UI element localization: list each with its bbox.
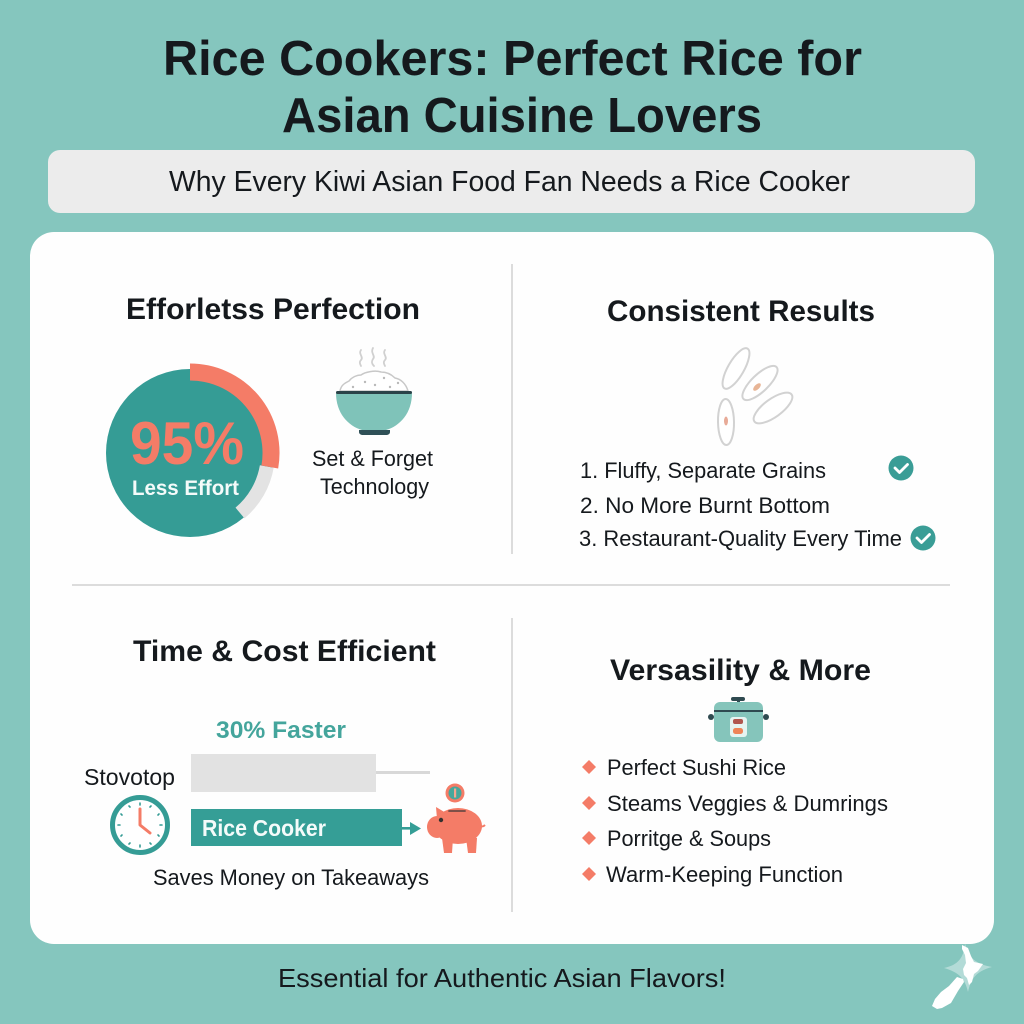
icon: rice cooker — [708, 697, 769, 742]
label: 30% faster: 30% Faster — [216, 717, 346, 744]
donut chart: 95% less effort: Less Effort — [132, 477, 239, 500]
bullet list — [582, 755, 888, 887]
footer tagline: Essential for Authentic Asian Flavors! — [278, 963, 726, 993]
subtitle banner — [48, 150, 975, 213]
heading: versatility and more: Versasility & More — [610, 654, 871, 687]
caption: set and forget technology: Set & Forget — [312, 446, 433, 471]
bullet list: Steams Veggies & Dumrings — [607, 791, 888, 816]
title: Rice Cookers: Perfect Rice for — [163, 32, 862, 86]
title — [163, 32, 862, 143]
title: Asian Cuisine Lovers — [282, 89, 762, 143]
heading: time and cost efficient: Time & Cost Efficient — [133, 635, 436, 668]
icon: rice bowl with steam — [336, 348, 412, 435]
bullet list: Porritge & Soups — [607, 826, 771, 851]
numbered list: 3. Restaurant-Quality Every Time — [579, 526, 902, 551]
numbered list: 1. Fluffy, Separate Grains — [580, 458, 826, 483]
heading: consistent results: Consistent Results — [607, 295, 875, 328]
icon: clock — [112, 798, 168, 852]
panel: versatility and more — [582, 654, 888, 887]
bullet list: Perfect Sushi Rice — [607, 755, 786, 780]
caption: set and forget technology — [312, 446, 433, 499]
label: stovetop: Stovotop — [84, 764, 175, 790]
icon: new zealand map with star — [932, 943, 992, 1009]
icon: rice grains — [718, 345, 797, 445]
bar: rice cooker time: Rice Cooker — [202, 815, 326, 841]
numbered list: 2. No More Burnt Bottom — [580, 493, 830, 518]
bar: stovetop time — [191, 754, 430, 792]
panel: consistent results — [579, 295, 936, 551]
caption: set and forget technology: Technology — [320, 474, 429, 499]
arrow: to piggy bank — [402, 822, 421, 835]
icon: check mark two — [910, 526, 936, 550]
panel: effortless perfection — [106, 293, 433, 537]
caption: saves money on takeaways: Saves Money on Takeaways — [153, 865, 429, 890]
heading: effortless perfection: Efforletss Perfection — [126, 293, 420, 326]
panel: time and cost efficient — [84, 635, 485, 890]
subtitle banner: Why Every Kiwi Asian Food Fan Needs a Rice Cooker — [169, 166, 850, 198]
bullet list: Warm-Keeping Function — [606, 862, 843, 887]
donut chart: 95% less effort — [106, 369, 274, 537]
icon: piggy bank with coin — [427, 784, 485, 853]
main card — [30, 232, 994, 944]
bar: rice cooker time — [191, 809, 402, 846]
donut chart: 95% less effort: 95% — [130, 410, 244, 477]
numbered list — [579, 458, 902, 551]
icon: check mark one — [888, 456, 914, 480]
